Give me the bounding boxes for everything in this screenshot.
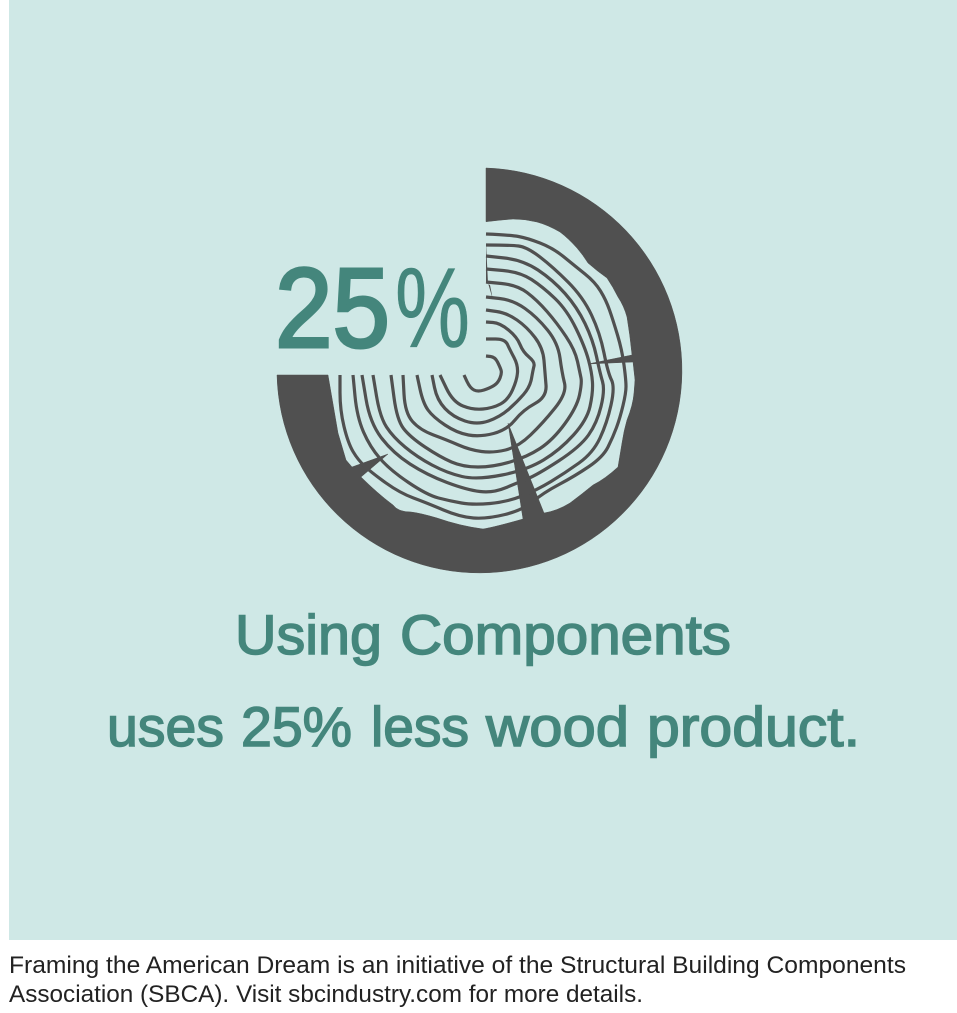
growth rings bbox=[340, 234, 626, 518]
big number: 25%: 25 bbox=[275, 245, 390, 371]
headline: Using bbox=[235, 603, 382, 666]
headline bbox=[107, 603, 860, 758]
headline: 25% bbox=[241, 695, 352, 758]
bark ring and cracks bbox=[277, 168, 682, 573]
big number: 25% bbox=[275, 245, 470, 371]
headline: uses bbox=[107, 695, 224, 758]
icon: tree cross-section with 25% wedge removed bbox=[277, 168, 682, 573]
top crack bbox=[486, 243, 493, 300]
headline: less bbox=[371, 695, 469, 758]
footer note: Association (SBCA). Visit sbcindustry.com for more details. bbox=[9, 981, 643, 1008]
headline: product. bbox=[647, 695, 860, 758]
headline: Components bbox=[400, 603, 731, 666]
footer note bbox=[9, 952, 906, 1008]
big number: 25%: % bbox=[395, 245, 470, 371]
footer note: Framing the American Dream is an initiative of the Structural Building Components bbox=[9, 952, 906, 979]
headline: wood bbox=[485, 695, 629, 758]
